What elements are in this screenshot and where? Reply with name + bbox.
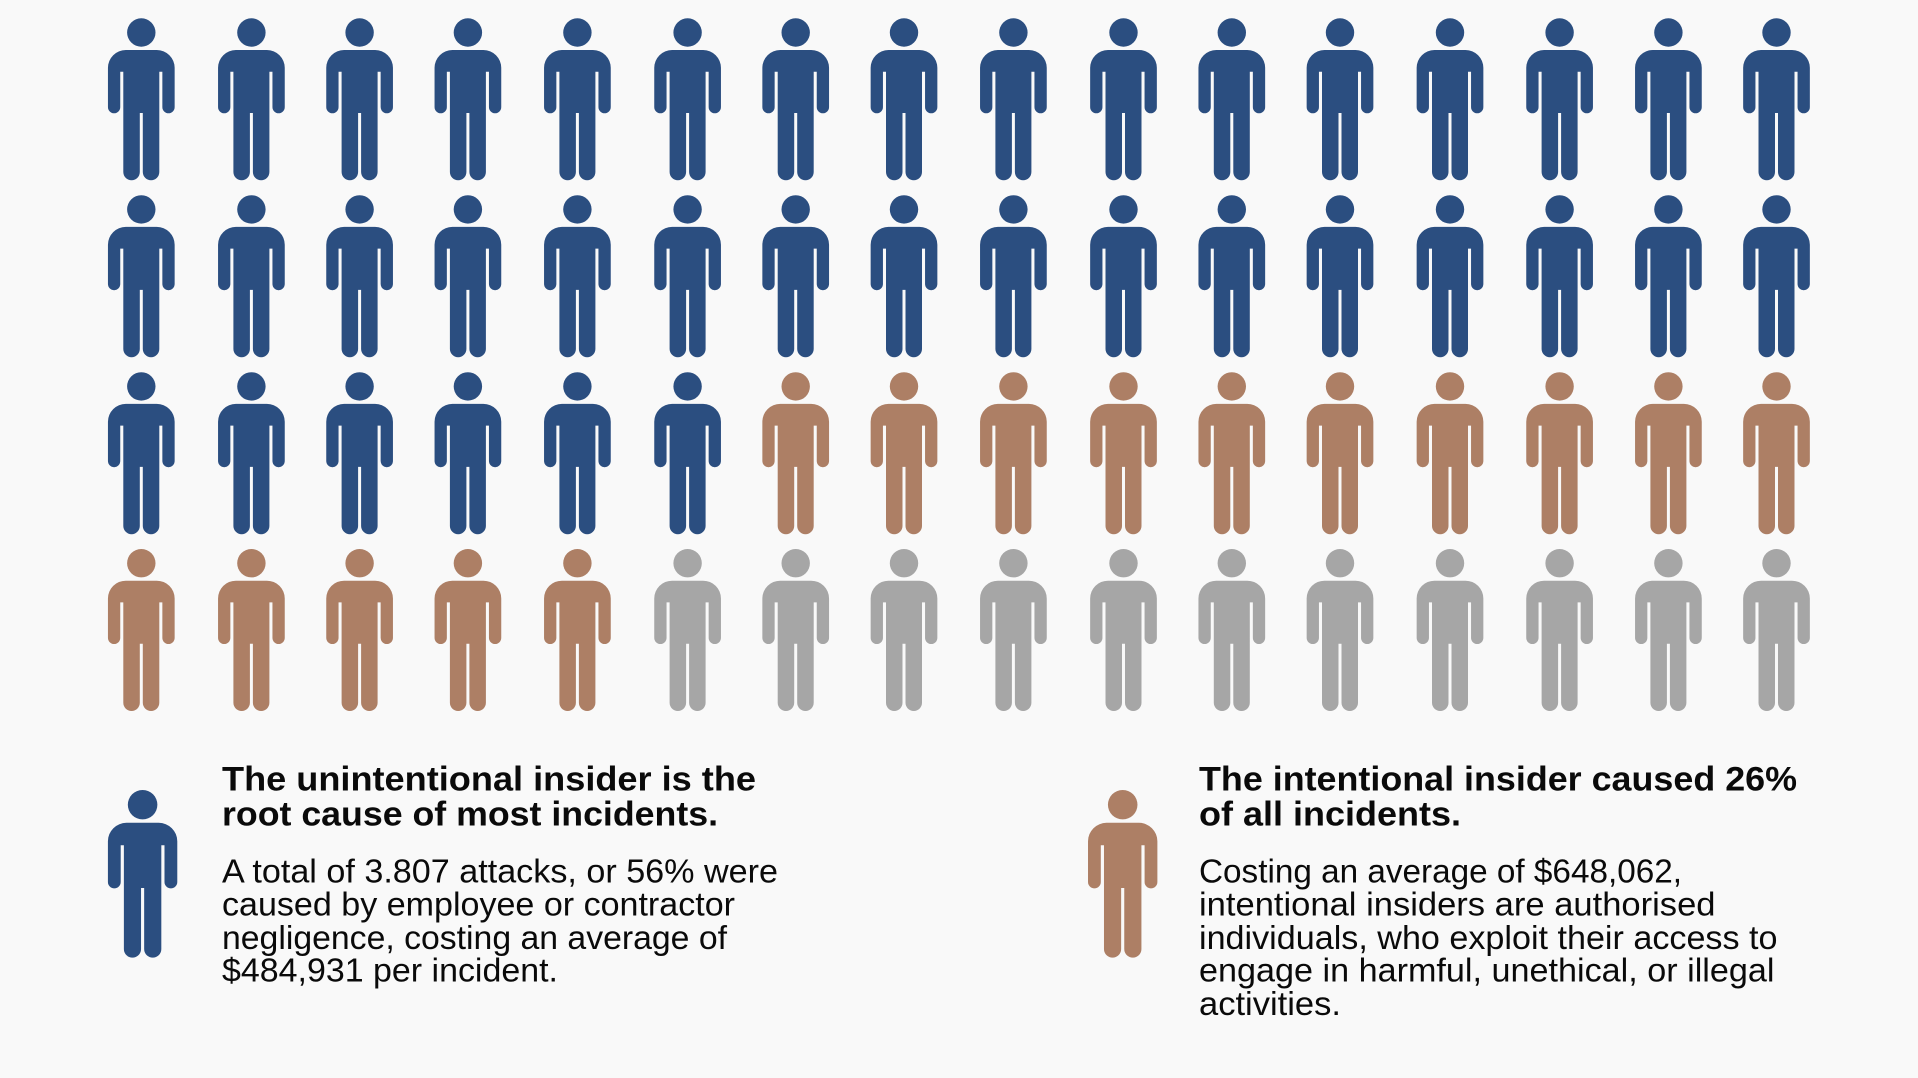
pictogram row 2: sixteen blue figures: [108, 195, 1810, 357]
heading: unintentional insider: root cause of most incidents.: [222, 795, 718, 833]
icon: brown figure: [1088, 790, 1157, 958]
pictogram row 4: five brown figures: [108, 549, 611, 711]
text block: unintentional insider description: $484,931 per incident.: [222, 952, 558, 989]
text block: intentional insider description: activities.: [1199, 985, 1341, 1022]
heading: intentional insider: The intentional insider caused 26%: [1199, 761, 1797, 799]
pictogram row 4: eleven grey figures: [654, 549, 1810, 711]
text block: unintentional insider description: caused by employee or contractor: [222, 886, 735, 923]
text block: unintentional insider description: negligence, costing an average of: [222, 919, 728, 956]
heading: intentional insider: [1199, 761, 1797, 833]
heading: unintentional insider: [222, 761, 756, 833]
text block: unintentional insider description: [222, 853, 778, 989]
heading: intentional insider: of all incidents.: [1199, 795, 1461, 833]
panel: unintentional insider: [108, 761, 778, 989]
text block: intentional insider description: engage in harmful, unethical, or illegal: [1199, 952, 1774, 989]
heading: unintentional insider: The unintentional insider is the: [222, 761, 756, 799]
pictogram row 1: sixteen blue figures: [108, 18, 1810, 180]
icon: blue figure: [108, 790, 177, 958]
pictogram row 3: six blue figures: [108, 372, 721, 534]
text block: unintentional insider description: A total of 3.807 attacks, or 56% were: [222, 853, 778, 890]
panel: intentional insider: [1088, 761, 1797, 1022]
text block: intentional insider description: individuals, who exploit their access to: [1199, 919, 1778, 956]
text block: intentional insider description: Costing an average of $648,062,: [1199, 853, 1682, 890]
text block: intentional insider description: [1199, 853, 1778, 1022]
text block: intentional insider description: intentional insiders are authorised: [1199, 886, 1716, 923]
pictogram row 3: ten brown figures: [762, 372, 1810, 534]
